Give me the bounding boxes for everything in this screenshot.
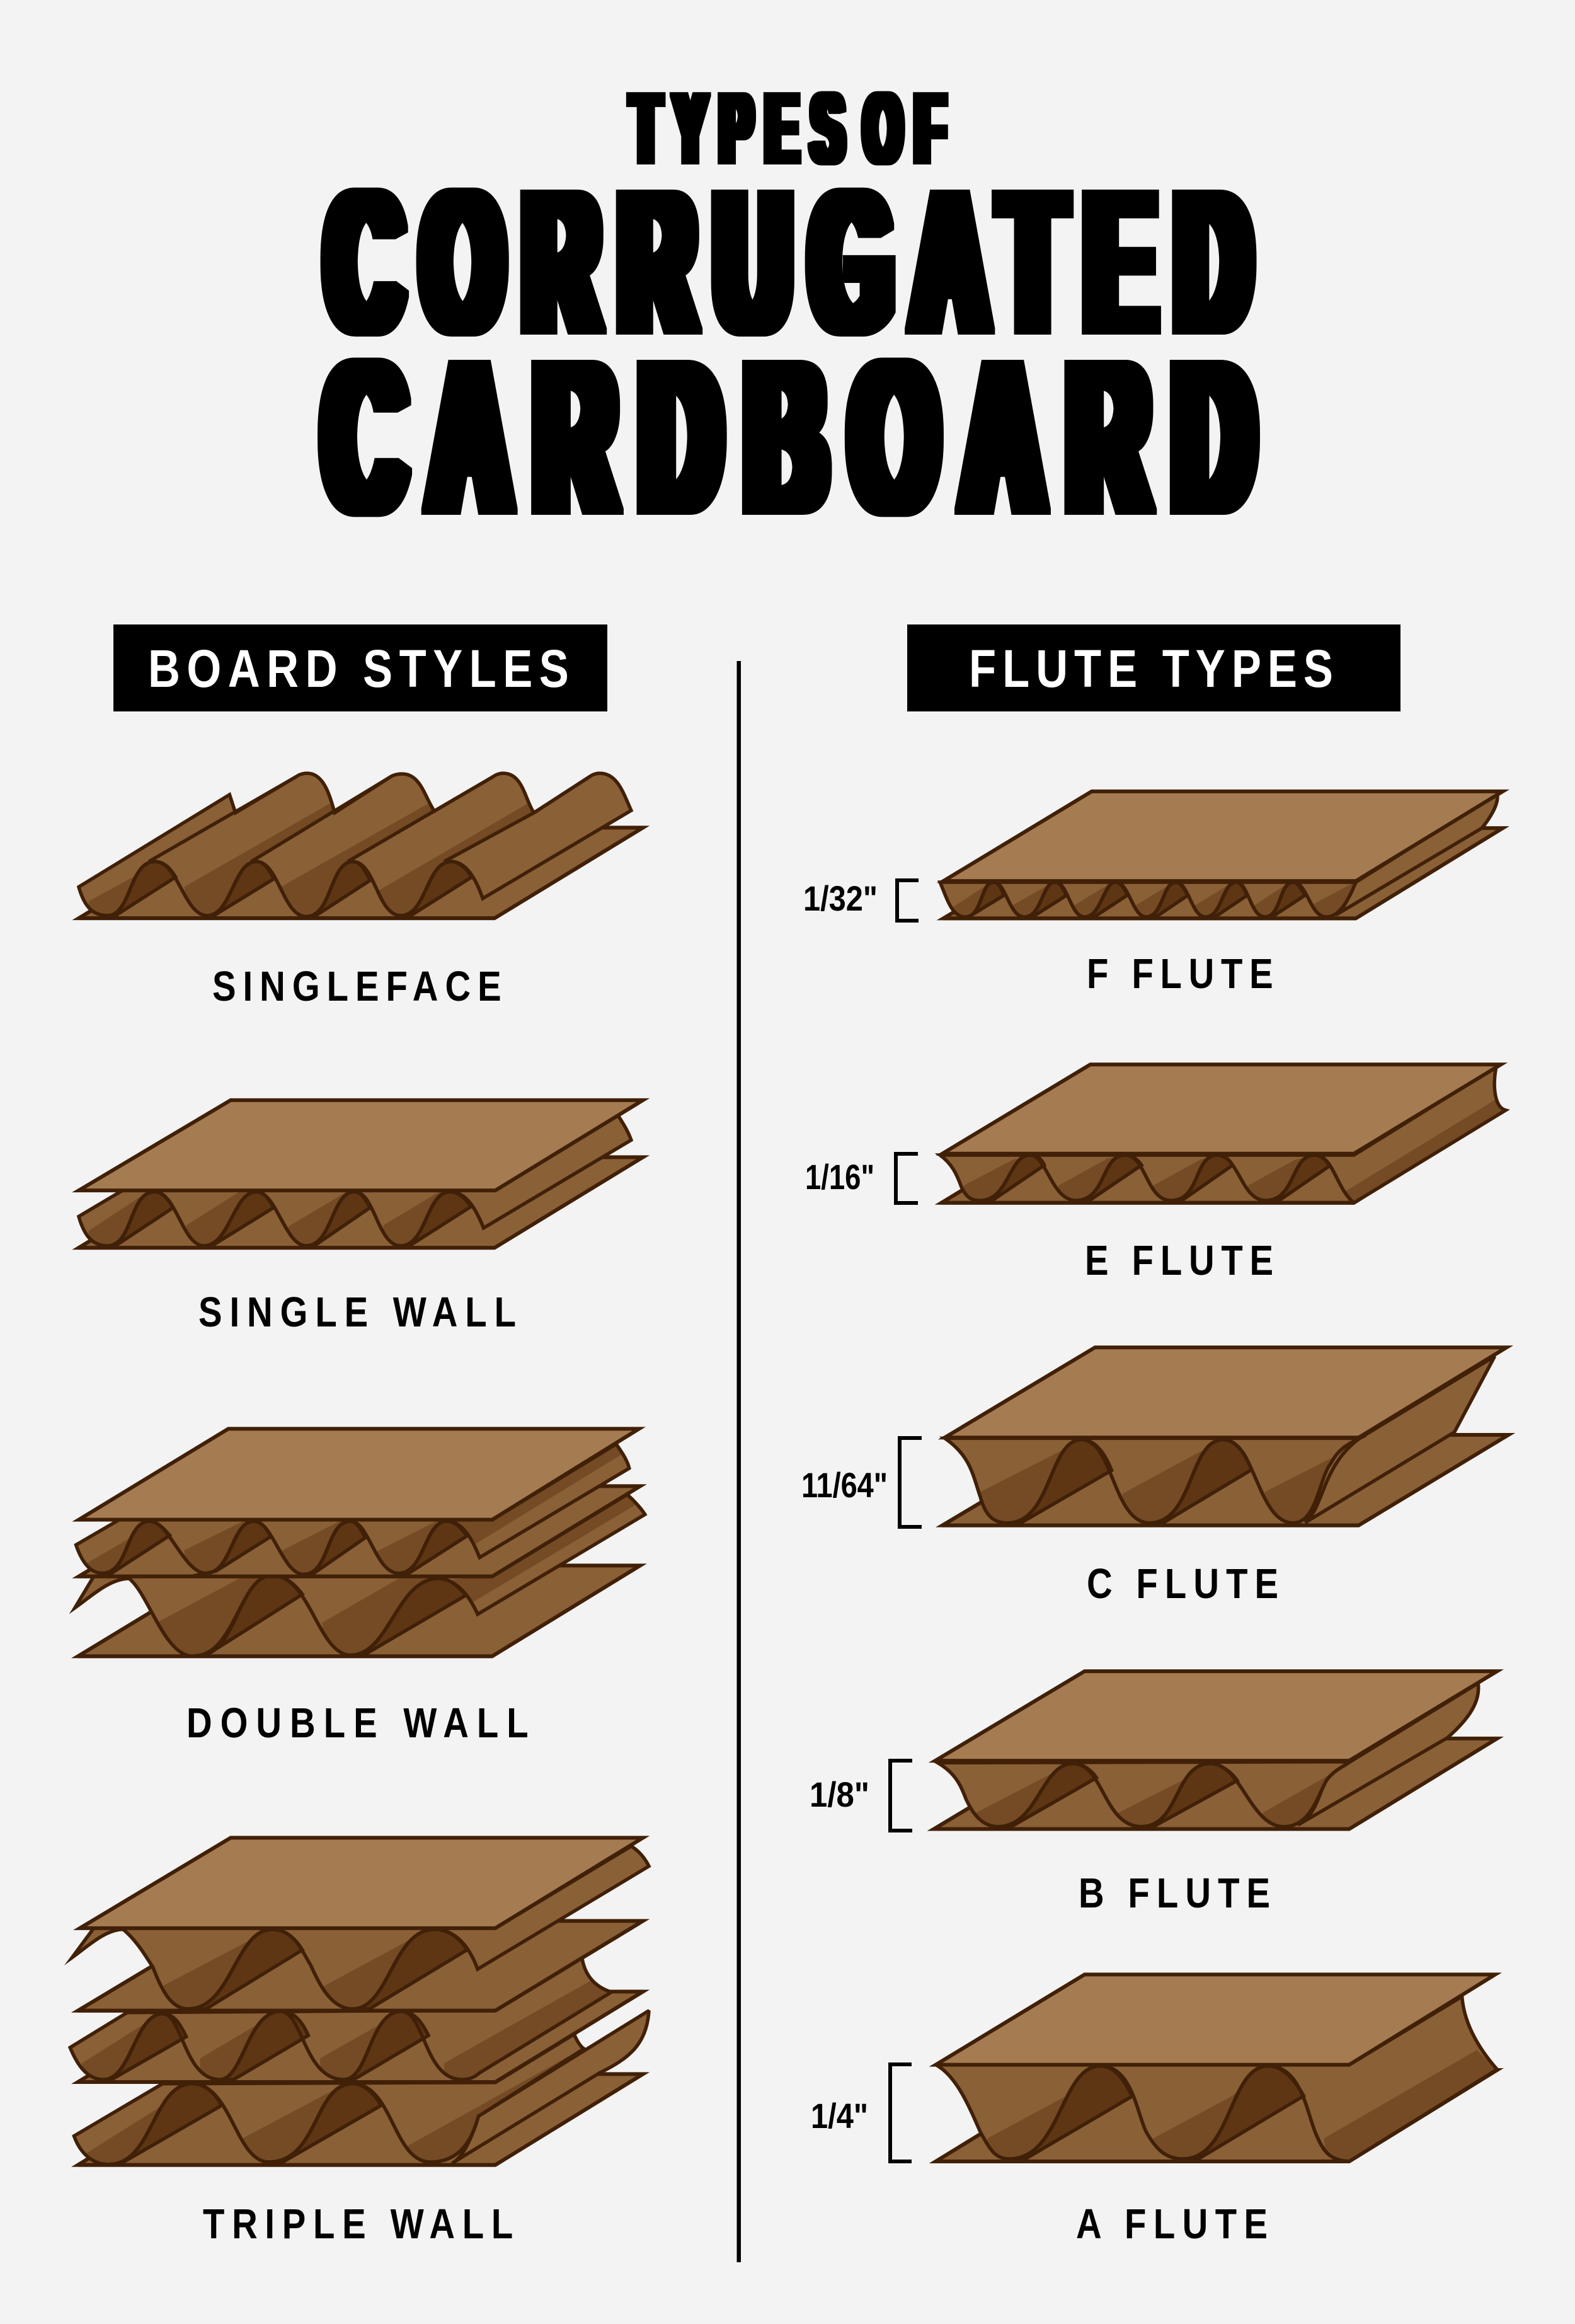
title line: cardboard: CARDBOARD xyxy=(325,317,1280,558)
center divider xyxy=(737,661,741,2262)
label: e flute: E FLUTE xyxy=(1085,1237,1273,1284)
label: f flute: F FLUTE xyxy=(1087,950,1273,998)
label: single wall: SINGLE WALL xyxy=(198,1289,516,1336)
illustration: triple wall xyxy=(70,1838,649,2165)
size label: 1/4 inch: 1/4" xyxy=(811,2096,868,2136)
bracket: b flute thickness xyxy=(890,1761,912,1831)
illustration: f flute xyxy=(940,791,1503,918)
illustration: b flute xyxy=(934,1671,1497,1829)
illustration: single wall xyxy=(79,1100,643,1248)
illustration: c flute xyxy=(942,1347,1508,1526)
heading: flute types: FLUTE TYPES xyxy=(969,640,1333,698)
size label: 1/8 inch: 1/8" xyxy=(810,1775,869,1814)
heading: flute types xyxy=(907,624,1400,711)
title line: types of: TYPES OF xyxy=(631,73,958,184)
label: singleface: SINGLEFACE xyxy=(212,963,501,1010)
heading: board styles: BOARD STYLES xyxy=(148,640,569,698)
size label: 1/16 inch: 1/16" xyxy=(805,1157,874,1197)
illustration: singleface xyxy=(79,773,643,918)
label: b flute: B FLUTE xyxy=(1079,1870,1270,1917)
title xyxy=(325,73,1280,558)
bracket: f flute thickness xyxy=(897,880,919,921)
size label: 11/64 inch: 11/64" xyxy=(801,1465,888,1505)
size label: 1/32 inch: 1/32" xyxy=(803,878,878,918)
bracket: c flute thickness xyxy=(900,1438,922,1527)
bracket: a flute thickness xyxy=(890,2064,912,2161)
title line: corrugated: CORRUGATED xyxy=(328,149,1273,374)
panel: flute types xyxy=(801,624,1508,2248)
heading: board styles xyxy=(113,624,607,711)
label: c flute: C FLUTE xyxy=(1087,1560,1278,1608)
bracket: e flute thickness xyxy=(896,1154,918,1203)
label: triple wall: TRIPLE WALL xyxy=(203,2200,513,2248)
illustration: a flute xyxy=(936,1974,1497,2161)
panel: board styles xyxy=(70,624,649,2248)
label: double wall: DOUBLE WALL xyxy=(186,1700,529,1747)
illustration: double wall xyxy=(75,1429,645,1657)
illustration: e flute xyxy=(940,1064,1506,1203)
label: a flute: A FLUTE xyxy=(1076,2200,1268,2248)
